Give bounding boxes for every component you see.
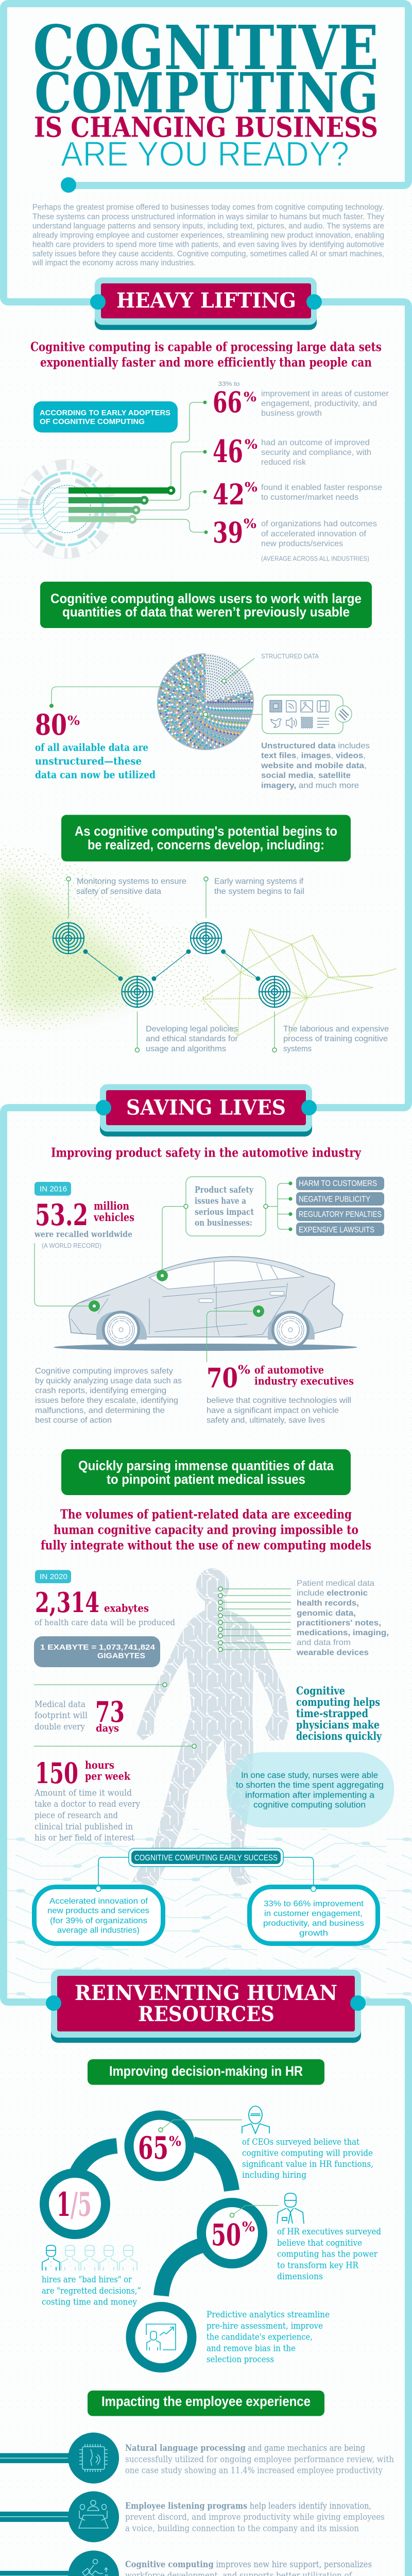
intro text: [32, 203, 384, 267]
panel: accelerated innovation: average all industries): [57, 1926, 140, 1935]
stat: 73 days: 73: [95, 1695, 125, 1728]
text: legal policies: Developing legal policies: [146, 1025, 238, 1033]
intro text: understand language patterns and sensory inputs, including text, pictures, and audio. The systems are: [32, 222, 384, 231]
stat: 150 hours per week: 150: [35, 1756, 78, 1790]
text: improves safety: Cognitive computing improves safety: [35, 1367, 173, 1376]
stat: 66%: [213, 381, 389, 419]
stat: 80% unstructured: unstructured—these: [35, 755, 142, 767]
text: monitoring systems: Monitoring systems to ensure: [77, 877, 186, 886]
text: helps physicians: decisions quickly: [296, 1730, 382, 1743]
callout: nurses case study: [227, 1752, 394, 1827]
text: CEOs surveyed: significant value in HR functions,: [242, 2159, 373, 2169]
stat: 73 days: footprint will: [35, 1710, 88, 1720]
intro text: These systems can process unstructured information in ways similar to humans but much faster. They: [32, 212, 384, 222]
icon: female CEO: [242, 2106, 269, 2133]
panel: customer engagement improvement: in customer engagement,: [264, 1909, 363, 1918]
icons: five people, one highlighted: [42, 2245, 137, 2270]
text: unstructured data types: [261, 742, 370, 790]
stat: 46%: security and compliance, with: [261, 448, 371, 457]
intro text: will impact the economy across many industries.: [32, 259, 196, 267]
stat: 53.2 million vehicles: IN 2016: [40, 1185, 67, 1194]
stat: 66%: business growth: [261, 409, 322, 418]
concerns background: speckled cloud and network: [0, 845, 397, 1036]
icon: manager: [277, 2193, 304, 2224]
stat: 80% unstructured: [35, 687, 182, 781]
stat: 150 hours per week: per week: [85, 1770, 131, 1783]
stat: 66%: %: [244, 389, 256, 404]
title: [33, 12, 379, 174]
text: patient medical data: include electronic: [297, 1589, 368, 1598]
ring: one in five hires: [44, 2173, 106, 2234]
text: unstructured data types: imagery, and much more: [261, 781, 359, 790]
green banner: large quantities of data: [40, 582, 372, 628]
text: monitoring systems: [76, 877, 186, 896]
item: employee listening programs: Employee listening programs help leaders identify innovation,: [125, 2501, 371, 2511]
stat: 42%: 42: [213, 478, 245, 511]
list: business consequences: NEGATIVE PUBLICITY: [299, 1195, 370, 1204]
callout: early adopters: [33, 401, 178, 433]
text: patient medical data: health records,: [297, 1599, 359, 1608]
chart: dotted pie of structured vs unstructured data: [157, 653, 254, 750]
stat: 70% of executives: industry executives: [254, 1375, 354, 1387]
ring: predictive analytics icon: [131, 2307, 192, 2368]
section heading: heavy lifting: HEAVY LIFTING: [116, 289, 296, 313]
stat: 2,314 exabytes: [35, 1570, 175, 1628]
green banner: employee experience: [88, 2391, 324, 2416]
intro text: health care providers to spend more time with patients, and even saving lives by identifying automotive: [32, 240, 384, 249]
stat: 66%: engagement, productivity, and: [261, 399, 377, 408]
item: employee listening programs: [0, 2492, 385, 2542]
section heading: saving lives: SAVING LIVES: [126, 1095, 286, 1120]
subheading: patient data volumes: human cognitive capacity and proving impossible to: [54, 1522, 358, 1537]
text: bad hires: [42, 2275, 141, 2307]
green banner: large quantities of data: quantities of data that weren’t previously usable: [62, 604, 350, 619]
stat: 46%: 46: [213, 434, 243, 470]
panel: product safety impact: Product safety: [195, 1185, 253, 1195]
callout: exabyte definition: [34, 1636, 160, 1667]
stat: 39%: [213, 516, 377, 563]
text: predictive analytics: the candidate's experience,: [207, 2332, 313, 2342]
text: helps physicians: computing helps: [296, 1696, 380, 1709]
text: improves safety: issues before they escalate, identifying: [35, 1396, 178, 1405]
panel: product safety impact: on businesses:: [195, 1218, 252, 1228]
ring: one in five hires: 1/5: [57, 2185, 92, 2224]
text: patient medical data: Patient medical data: [297, 1579, 374, 1588]
green banner: decision making: Improving decision-making in HR: [109, 2063, 303, 2079]
text: HR executives surveyed: believe that cognitive: [277, 2238, 362, 2248]
text: CEOs surveyed: cognitive computing will provide: [242, 2148, 373, 2158]
text: helps physicians: time-strapped: [296, 1707, 368, 1720]
stat: 150 hours per week: [34, 1756, 140, 1843]
callout: exabyte definition: GIGABYTES: [97, 1652, 145, 1660]
ring: 65% of CEOs: %: [169, 2134, 181, 2149]
stat: 70% of executives: [207, 1363, 354, 1425]
callout: nurses case study: information after implementing a: [245, 1791, 375, 1800]
text: patient medical data: [296, 1579, 389, 1657]
stat: 39%: %: [244, 516, 256, 531]
callout: nurses case study: to shorten the time spent aggregating: [236, 1781, 384, 1790]
text: predictive analytics: pre-hire assessment, improve: [207, 2321, 323, 2331]
stat: 46%: reduced risk: [261, 458, 306, 467]
panel: accelerated innovation: (for 39% of organizations: [50, 1917, 147, 1925]
stat: 150 hours per week: Amount of time it would: [34, 1788, 132, 1798]
text: improves safety: crash reports, identifying emerging: [35, 1386, 166, 1395]
intro text: Perhaps the greatest promise offered to businesses today comes from cognitive computing technology.: [32, 203, 384, 212]
stat: 2,314 exabytes: of health care data will be produced: [35, 1618, 175, 1628]
stat: 39%: of organizations had outcomes: [261, 520, 377, 529]
text: HR executives surveyed: to transform key HR: [277, 2261, 359, 2270]
stat: 53.2 million vehicles: 53.2: [35, 1198, 88, 1232]
text: legal policies: and ethical standards for: [146, 1035, 238, 1043]
ring: 50% of HR executives: 50: [211, 2217, 241, 2252]
stat: 42%: found it enabled faster response: [261, 483, 382, 492]
stat: 39%: 39: [213, 516, 243, 549]
illustration: human figure with circuitry: [131, 1568, 289, 1886]
stat: 53.2 million vehicles: were recalled worldwide: [34, 1229, 132, 1239]
subheading: patient data volumes: The volumes of patient-related data are exceeding: [60, 1506, 352, 1521]
panel: accelerated innovation: Accelerated innovation of: [49, 1897, 148, 1906]
figure data lines: [34, 1587, 291, 1748]
text: improves safety: [35, 1367, 182, 1425]
text: CEOs surveyed: [242, 2137, 373, 2180]
text: bad hires: hires are “bad hires" or: [42, 2275, 132, 2284]
stat: 80% unstructured: %: [67, 713, 80, 728]
list: business consequences: [296, 1177, 384, 1236]
subheading: processing large data sets: [30, 339, 382, 370]
stat: 73 days: Medical data: [35, 1699, 85, 1709]
section heading: reinventing human resources: REINVENTING HUMAN: [75, 1981, 337, 2005]
stat: 150 hours per week: piece of research and: [35, 1810, 118, 1821]
panel: product safety impact: issues have a: [195, 1196, 246, 1206]
text: unstructured data types: social media , satellite: [261, 771, 351, 780]
text: bad hires: costing time and money: [42, 2297, 138, 2307]
diagram: HR connecting arcs: [76, 2144, 232, 2296]
text: HR executives surveyed: dimensions: [277, 2272, 323, 2281]
item: employee listening programs: prevent discord, and improve productivity while giving employees: [125, 2512, 385, 2522]
stat: 39%: of accelerated innovation of: [261, 530, 367, 538]
text: improves safety: malfunctions, and determining the: [35, 1406, 165, 1415]
item: new hire support: Cognitive computing improves new hire support, personalizes: [125, 2560, 372, 2569]
stat: 70% of executives: of automotive: [254, 1364, 324, 1376]
ring: 50% of HR executives: [201, 2202, 279, 2264]
green banner: patient medical issues: to pinpoint patient medical issues: [107, 1471, 305, 1487]
panel: customer engagement improvement: 33% to 66% improvement: [264, 1900, 364, 1908]
section heading: saving lives: [96, 1084, 317, 1137]
stat: 70% of executives: safety and, ultimately, save lives: [207, 1416, 325, 1425]
panel: accelerated innovation: [34, 1886, 163, 1943]
title connector dot: [61, 177, 76, 193]
stat: 70% of executives: 70: [207, 1363, 238, 1394]
text: unstructured data types: text files, images, videos,: [261, 752, 366, 760]
callout: early adopters: ACCORDING TO EARLY ADOPTERS: [40, 409, 170, 417]
diagram: early success: COGNITIVE COMPUTING EARLY SUCCESS: [134, 1854, 278, 1862]
panel: customer engagement improvement: growth: [299, 1929, 328, 1938]
stat: 46%: [213, 434, 371, 470]
item: natural language processing: [0, 2433, 394, 2483]
stat: 70% of executives: believe that cognitive technologies will: [207, 1396, 351, 1405]
intro text: already improving employee and customer experiences, streamlining new product innovation, enabling: [32, 231, 384, 240]
stat: 46%: %: [245, 437, 258, 452]
green banner: concerns: As cognitive computing's potential begins to: [75, 823, 337, 839]
stat: 39%: (AVERAGE ACROSS ALL INDUSTRIES): [261, 555, 369, 563]
text: unstructured data types: Unstructured data includes: [261, 742, 370, 751]
stat: 73 days: days: [96, 1722, 119, 1734]
stat: 66%: 66: [213, 385, 242, 419]
text: improves safety: best course of action: [35, 1416, 112, 1425]
circuit floor background: [7, 1829, 412, 2001]
text: CEOs surveyed: including hiring: [242, 2170, 306, 2180]
stat: 53.2 million vehicles: [34, 1182, 134, 1249]
green banner: concerns: be realized, concerns develop, including:: [88, 837, 324, 852]
stat: 53.2 million vehicles: million: [94, 1199, 129, 1212]
stat: 150 hours per week: hours: [85, 1759, 114, 1771]
stat: 80% unstructured: data can now be utilized: [35, 769, 156, 781]
stat: 150 hours per week: his or her field of interest: [35, 1833, 134, 1843]
text: helps physicians: Cognitive: [296, 1685, 345, 1698]
text: HR executives surveyed: of HR executives surveyed: [277, 2227, 381, 2236]
stat: 66%: 33% to: [218, 381, 240, 387]
intro text: safety issues before they cause accidents. Cognitive computing, sometimes called AI or smart machines,: [32, 249, 384, 258]
text: bad hires: are "regretted decisions,”: [42, 2286, 141, 2296]
text: training systems: process of training cognitive: [283, 1035, 388, 1043]
callout: exabyte definition: 1 EXABYTE = 1,073,741,824: [40, 1643, 156, 1652]
text: unstructured data types: website and mobile data ,: [261, 761, 367, 770]
stat: 73 days: [35, 1695, 125, 1734]
text: legal policies: [146, 1025, 238, 1054]
list: business consequences: HARM TO CUSTOMERS: [299, 1179, 377, 1188]
panel: product safety impact: serious impact: [195, 1207, 254, 1217]
stat: 70% of executives: have a significant impact on vehicle: [207, 1406, 339, 1415]
connectors from bars to statistics: [136, 401, 208, 534]
green banner: employee experience: Impacting the employee experience: [101, 2394, 311, 2409]
ring: 65% of CEOs: [129, 2115, 242, 2176]
text: early warning systems: [214, 877, 304, 896]
subheading: patient data volumes: [41, 1506, 371, 1553]
text: early warning systems: Early warning systems if: [214, 877, 304, 886]
green banner: patient medical issues: Quickly parsing immense quantities of data: [78, 1458, 334, 1473]
stat: 42%: to customer/market needs: [261, 493, 358, 502]
item: natural language processing: Natural language processing and game mechanics are being: [125, 2443, 365, 2453]
list: business consequences: EXPENSIVE LAWSUITS: [299, 1226, 374, 1234]
text: HR executives surveyed: computing has the power: [277, 2249, 377, 2259]
text: patient medical data: practitioners' notes,: [297, 1619, 381, 1628]
item: new hire support: [0, 2550, 372, 2576]
section heading: reinventing human resources: RESOURCES: [138, 2002, 274, 2026]
list: business consequences: REGULATORY PENALTIES: [299, 1210, 382, 1219]
text: helps physicians: physicians make: [296, 1719, 380, 1732]
stat: 80% unstructured: of all available data are: [35, 741, 148, 753]
text: training systems: systems: [283, 1045, 312, 1054]
stat: 150 hours per week: clinical trial published in: [35, 1822, 133, 1832]
green banner: concerns: [61, 815, 351, 861]
text: patient medical data: wearable devices: [296, 1649, 369, 1657]
label: structured data: STRUCTURED DATA: [261, 652, 319, 660]
stat: 42%: %: [245, 480, 258, 495]
panel: accelerated innovation: new products and services: [47, 1907, 149, 1916]
title: ARE YOU READY?: [61, 134, 349, 174]
stat: 42%: [213, 478, 382, 511]
section heading: reinventing human resources: [46, 1970, 366, 2043]
text: training systems: The laborious and expensive: [283, 1025, 389, 1033]
text: training systems: [283, 1025, 389, 1054]
panel: customer engagement improvement: [249, 1886, 378, 1943]
stat: 150 hours per week: take a doctor to read every: [35, 1799, 140, 1809]
text: legal policies: usage and algorithms: [146, 1045, 226, 1054]
diagram: concerns targets and links: [53, 877, 290, 1052]
text: CEOs surveyed: of CEOs surveyed believe that: [242, 2137, 359, 2147]
stat: 2,314 exabytes: IN 2020: [40, 1572, 67, 1581]
green banner: large quantities of data: Cognitive computing allows users to work with large: [50, 590, 362, 606]
text: predictive analytics: [207, 2310, 330, 2364]
stat: 2,314 exabytes: 2,314: [35, 1587, 99, 1619]
diagram: early success: [98, 1849, 314, 1886]
subheading: automotive: Improving product safety in the automotive industry: [51, 1145, 362, 1160]
section heading: heavy lifting: [90, 277, 322, 330]
green banner: decision making: [88, 2059, 324, 2085]
circular data graphic with bars: [0, 460, 175, 558]
panel: unstructured data icons: [208, 695, 352, 734]
car callout markers: [35, 1207, 264, 1362]
stat: 46%: had an outcome of improved: [261, 438, 370, 447]
stat: 53.2 million vehicles: vehicles: [93, 1211, 134, 1224]
text: helps physicians: [296, 1685, 382, 1743]
ring: 50% of HR executives: %: [242, 2219, 255, 2235]
stat: 39%: new products/services: [261, 539, 343, 548]
text: monitoring systems: safety of sensitive data: [76, 887, 161, 896]
text: improves safety: by quickly analyzing usage data such as: [35, 1377, 182, 1385]
panel: product safety impact: [184, 1177, 293, 1236]
text: patient medical data: medications, imaging,: [297, 1629, 389, 1637]
green banner: patient medical issues: [61, 1449, 351, 1495]
stat: 53.2 million vehicles: (A WORLD RECORD): [42, 1242, 101, 1249]
text: predictive analytics: and remove bias in the: [207, 2343, 296, 2353]
stat: 80% unstructured: 80: [35, 708, 67, 741]
stat: 66%: improvement in areas of customer: [261, 389, 389, 398]
text: patient medical data: and data from: [297, 1638, 351, 1647]
text: predictive analytics: Predictive analytics streamline: [207, 2310, 330, 2319]
text: early warning systems: the system begins to fail: [214, 887, 304, 896]
illustration: car: [54, 1257, 357, 1351]
ring: 65% of CEOs: 65: [138, 2130, 168, 2166]
item: employee listening programs: a voice, building connection to the company and its mission: [125, 2523, 359, 2533]
panel: customer engagement improvement: productivity, and business: [263, 1919, 364, 1928]
text: predictive analytics: selection process: [207, 2354, 274, 2364]
item: natural language processing: one case study showing an 11.4% increased employee productivity: [125, 2466, 383, 2476]
stat: 73 days: double every: [35, 1722, 85, 1732]
text: patient medical data: genomic data,: [297, 1609, 356, 1618]
text: HR executives surveyed: [277, 2227, 381, 2281]
callout: nurses case study: In one case study, nurses were able: [241, 1771, 378, 1780]
stat: 2,314 exabytes: exabytes: [104, 1602, 149, 1615]
callout: early adopters: OF COGNITIVE COMPUTING: [40, 418, 145, 426]
callout: nurses case study: cognitive computing solution: [253, 1800, 366, 1809]
stat: 70% of executives: %: [238, 1363, 250, 1377]
